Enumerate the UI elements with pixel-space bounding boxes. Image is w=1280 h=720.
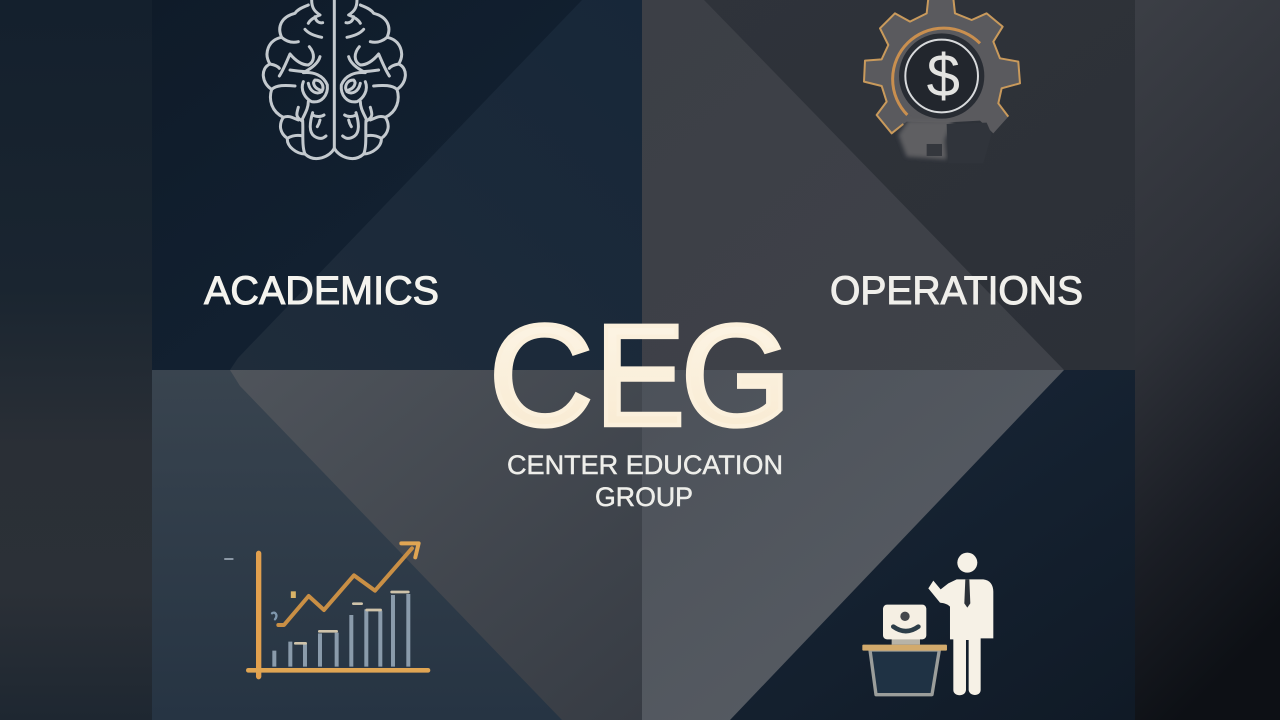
panel: operations quadrant — [642, 0, 1135, 370]
monitor — [883, 605, 926, 639]
dollar sign: $ — [927, 42, 960, 109]
diamond: top-left facet — [230, 0, 642, 370]
logo: CEG wordmark: E — [595, 295, 685, 456]
icon: brain — [263, 0, 405, 159]
small legend tick — [225, 556, 233, 562]
bar caps — [295, 592, 408, 643]
bars — [274, 594, 408, 667]
person body — [928, 579, 993, 695]
background: left strip — [0, 0, 152, 720]
background: right strip — [1135, 0, 1280, 720]
vertical axis — [251, 553, 267, 677]
trend arrow — [278, 548, 412, 625]
label: operations: OPERATIONS — [830, 269, 1083, 313]
right hemisphere — [334, 0, 405, 159]
person head — [957, 553, 977, 573]
diamond: bottom-right facet — [642, 370, 1064, 720]
icon: gear with dollar sign — [864, 0, 1020, 163]
panel: people quadrant — [642, 370, 1135, 720]
panel: growth quadrant — [152, 370, 642, 720]
icon: growth chart — [225, 543, 428, 677]
white ring — [905, 40, 978, 112]
gear dark cut — [947, 123, 992, 163]
left hemisphere — [263, 0, 334, 159]
dark hub — [899, 33, 984, 119]
logo: CEG wordmark: C — [489, 295, 593, 456]
panel: academics quadrant — [152, 0, 642, 370]
label: academics: ACADEMICS — [204, 269, 439, 313]
small markers — [272, 613, 276, 619]
subtitle: center education group — [507, 450, 783, 512]
monitor stand — [892, 639, 920, 645]
horizontal axis — [248, 663, 428, 677]
logo: CEG wordmark — [489, 295, 791, 456]
icon: person at desk — [862, 553, 993, 695]
gear body — [864, 0, 1020, 133]
gear gold outline — [864, 0, 1020, 133]
arrowhead — [401, 543, 419, 557]
subtitle: center education group: GROUP — [595, 482, 693, 512]
gear lower notch — [927, 144, 942, 156]
desk body — [870, 650, 939, 695]
gear lower smudge — [898, 120, 953, 159]
monitor face — [900, 612, 910, 621]
logo: CEG wordmark: G — [681, 295, 791, 456]
gold ring — [893, 28, 980, 115]
necktie — [964, 579, 970, 608]
desk top — [862, 645, 947, 651]
subtitle: center education group: CENTER EDUCATION — [507, 450, 783, 480]
diamond: bottom-left facet — [230, 370, 642, 720]
diamond: top-right facet — [642, 0, 1064, 370]
